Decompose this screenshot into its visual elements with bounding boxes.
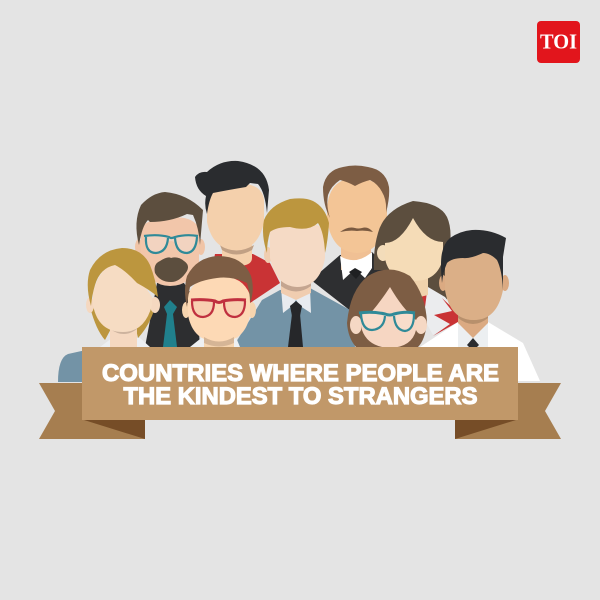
logo: TOI [537, 21, 580, 63]
person: blonde woman with blue top [58, 248, 160, 382]
title ribbon [39, 347, 561, 439]
ribbon left fold [84, 420, 145, 439]
ribbon right tail [455, 383, 561, 439]
person: moustache man in black vest [311, 166, 395, 312]
ribbon main panel [82, 347, 518, 420]
person: front man with red glasses [182, 256, 256, 347]
person: brown hair man with teal glasses and beard [135, 192, 205, 347]
person: black hair man in white shirt [420, 230, 540, 381]
person: woman with dark brown hair in white jacket and red blouse [374, 201, 458, 336]
person: gold hair man in blue suit [233, 198, 355, 347]
title text: THE KINDEST TO STRANGERS [124, 383, 478, 410]
person: front woman with teal glasses [347, 270, 427, 348]
title text: COUNTRIES WHERE PEOPLE ARE [102, 360, 499, 387]
title text [102, 360, 499, 410]
person: black hair man in red shirt [195, 161, 280, 320]
ribbon right fold [455, 420, 516, 439]
ribbon left tail [39, 383, 145, 439]
logo: TOI: TOI [540, 30, 577, 54]
